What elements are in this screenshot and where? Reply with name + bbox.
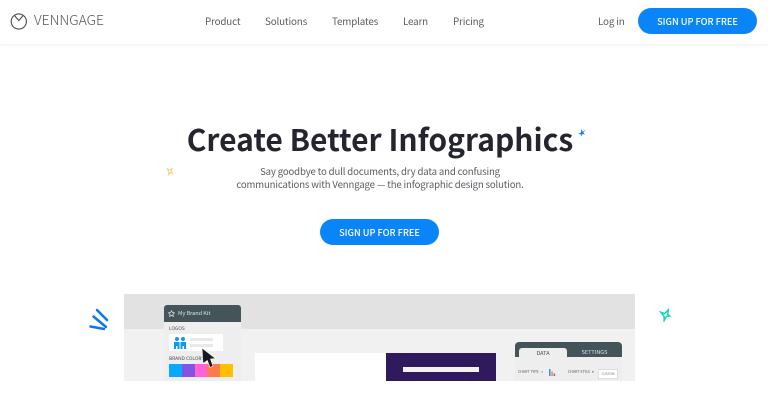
data tab — [519, 348, 567, 358]
header sign up button: SIGN UP FOR FREE — [657, 14, 738, 28]
nav link: Pricing: Pricing — [453, 14, 484, 28]
header sign up button — [638, 8, 757, 34]
icon: mouse cursor — [202, 348, 216, 368]
icon: blue logo figures — [174, 337, 186, 349]
nav link: Learn: Learn — [403, 14, 428, 28]
white heading bar — [403, 367, 479, 372]
icon: yellow sparkle — [166, 167, 174, 176]
icon: chart type bars — [549, 369, 556, 376]
hero sign up button: SIGN UP FOR FREE — [339, 225, 420, 239]
header navigation bar — [0, 0, 768, 44]
logo card — [169, 334, 223, 351]
icon: teal sparkle — [659, 308, 672, 322]
panel: my brand kit — [164, 305, 241, 381]
title: Create Better Infographics — [187, 116, 573, 160]
chart type label: CHART TYPE ▪ — [518, 370, 544, 375]
subtitle text: communications with Venngage — the infographic design solution. — [236, 177, 524, 191]
subtitle text — [236, 164, 524, 191]
brand kit header — [164, 305, 241, 322]
app screenshot mockup — [124, 294, 635, 381]
nav link: Product: Product — [205, 14, 240, 28]
chart style label: CHART STYLE ▾ — [568, 370, 594, 375]
logos label: LOGOS — [169, 325, 185, 332]
top toolbar band — [124, 294, 635, 329]
nav link: Log in: Log in — [598, 14, 625, 28]
chart style box: CUSTOM — [602, 371, 614, 376]
brand colors label: BRAND COLORS — [169, 355, 204, 362]
placeholder lines — [190, 338, 213, 341]
panel header band — [515, 342, 622, 357]
data tab: DATA — [536, 349, 550, 357]
icon: blue burst lines — [89, 308, 108, 330]
white canvas — [255, 353, 386, 381]
brand colour swatches — [169, 364, 233, 377]
nav link: Templates: Templates — [332, 14, 378, 28]
nav link: Solutions: Solutions — [265, 14, 307, 28]
subtitle text: Say goodbye to dull documents, dry data and confusing — [260, 164, 500, 178]
icon: Venngage logo — [10, 13, 27, 30]
logo wordmark: VENNGAGE — [34, 10, 104, 30]
chart style box — [598, 369, 618, 379]
icon: blue sparkle — [578, 129, 586, 137]
purple canvas block — [386, 353, 496, 381]
hero sign up button — [320, 219, 439, 245]
icon: star — [168, 310, 175, 317]
panel: chart data — [515, 342, 622, 381]
brand kit header: My Brand Kit — [178, 309, 210, 317]
settings tab: SETTINGS — [582, 348, 607, 356]
